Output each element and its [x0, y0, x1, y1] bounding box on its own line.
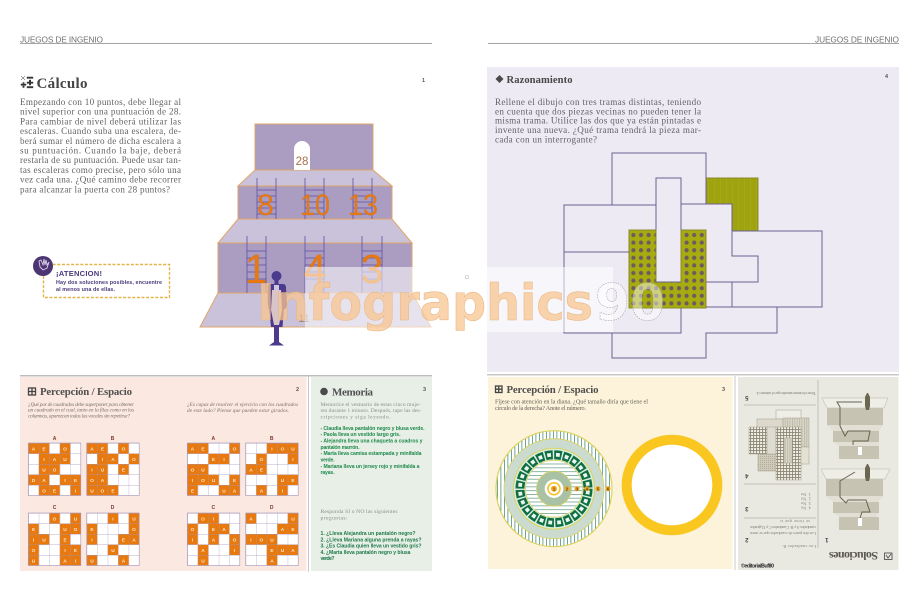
ladder numbers: 10	[300, 189, 330, 222]
list: outfit descriptions: - Claudia lleva pantalón negro y blusa verde.	[320, 426, 425, 432]
grid: right A: EI	[212, 457, 225, 463]
grid labels: C	[53, 505, 57, 511]
text block: Razonamiento instructions: cada con un interrogante?	[495, 134, 597, 144]
solution text: cuadrados A y B. Cuadrados C y D girados	[750, 525, 816, 530]
solution numbers: 4	[744, 472, 748, 478]
solution text: 1. No	[800, 492, 811, 497]
ladder numbers: 3	[361, 246, 383, 292]
piece: olive stripes	[706, 178, 758, 231]
list: outfit descriptions: rayas.	[320, 470, 335, 476]
text block: answer prompt	[320, 509, 398, 522]
grid: left A	[28, 443, 81, 496]
callout: atención: Hay dos soluciones posibles, encuentre	[56, 280, 162, 286]
solution numbers: 2	[744, 536, 748, 542]
chart: target circle	[496, 431, 612, 547]
solution text: 3. No	[800, 501, 811, 506]
text block: Cálculo instructions: escaleras. Cuando suba una escalera, de-	[20, 126, 181, 136]
panel: Cálculo text	[20, 76, 181, 194]
page number 3: 3	[722, 387, 725, 393]
list: outfit descriptions	[320, 426, 425, 476]
heading: Razonamiento: Razonamiento	[506, 75, 572, 86]
grid: right A: OU	[191, 467, 205, 473]
grid: right B: AI	[260, 488, 284, 494]
ladders upper level	[257, 178, 372, 219]
text block: Cálculo instructions: tas escaleras como precise, pero sólo una	[20, 165, 181, 175]
text block: right question: de este lado? Piense que pueden estar girados.	[187, 408, 289, 414]
list: questions: 2. ¿Lleva Mariana alguna prenda a rayas?	[320, 538, 422, 544]
grid: right C: U	[201, 558, 205, 564]
grid: right B	[246, 443, 298, 496]
heading: Cálculo: Cálculo	[36, 76, 88, 92]
grid: right A	[187, 443, 240, 496]
grid: right D: AE	[281, 527, 295, 533]
grid: left A: UO	[42, 467, 57, 473]
text block: answer prompt: Responda SI o NO las siguientes	[320, 509, 398, 515]
grid labels: B	[270, 436, 274, 442]
page number 2: 2	[296, 387, 299, 393]
solution numbers	[744, 394, 828, 542]
grid: left D: IU	[112, 516, 136, 522]
grid: left A: AEO	[32, 446, 67, 452]
piece: dotted U	[629, 230, 706, 308]
page header: left: JUEGOS DE INGENIO	[20, 34, 104, 44]
grid: right D: IOU	[250, 537, 274, 543]
grid: right C: AI	[201, 548, 236, 554]
grid: left A: OEI	[42, 488, 77, 494]
grid: left C: EUO	[32, 527, 78, 533]
solution text: Los dos pares de cuadrados que se unen	[749, 531, 816, 536]
list: outfit descriptions: pantalón marrón.	[320, 445, 360, 451]
grid labels: B	[111, 436, 115, 442]
grid: left A: IAU	[43, 457, 67, 463]
solution text: Tiene el mismo tamaño que el número 4.	[756, 391, 816, 396]
grid: right D: A	[270, 558, 274, 564]
callout: atención: ¡ATENCION!	[56, 269, 102, 278]
icon: check box	[884, 553, 892, 560]
grid: right B: AE	[249, 467, 264, 473]
text block: right question	[187, 402, 298, 414]
text block: answer prompt: preguntas:	[320, 516, 348, 522]
diagram: puzzle pieces	[564, 153, 822, 358]
ladder numbers: 13	[348, 189, 378, 222]
list: questions: 3. ¿Es Claudia quien lleva un vestido gris?	[320, 544, 422, 550]
grid: right A: AEO	[191, 446, 237, 452]
icon: diamond	[496, 75, 504, 83]
list: questions	[320, 531, 422, 562]
text block: Cálculo instructions: nivel superior con una puntuación de 28.	[20, 107, 181, 117]
grid labels	[53, 436, 274, 511]
text block: right question: ¿Es capaz de resolver el ejercicio con los cuadrados	[187, 402, 298, 408]
solution maze	[749, 410, 809, 480]
grid labels: D	[111, 505, 115, 511]
grid: left D: U	[111, 548, 115, 554]
icon: door with 28: 28	[296, 156, 308, 168]
grid: left C: OU	[53, 516, 78, 522]
heading: Memoria: Memoria	[332, 386, 374, 398]
text block: Memoria intro: Memorice el vestuario de estas cinco muje-	[320, 402, 421, 408]
page number 4: 4	[885, 74, 889, 80]
grid: right D	[246, 513, 298, 566]
grid: left D	[87, 513, 139, 566]
text block: left question: columnas, aparezcan todas las vocales sin repetirse?	[28, 414, 130, 420]
grid: left B: OA	[90, 478, 105, 484]
panel: Soluciones (upside down)	[738, 377, 898, 570]
list: outfit descriptions: - Paola lleva un vestido largo gris.	[320, 432, 401, 438]
grid: left D: UA	[90, 558, 126, 564]
text block: Cálculo instructions: Empezando con 10 puntos, debe llegar al	[20, 97, 181, 107]
text block: Cálculo instructions	[20, 97, 181, 194]
heading: Soluciones: Soluciones	[829, 549, 878, 563]
scale numbers: 123456	[553, 486, 610, 492]
grid: right B: UE	[281, 478, 295, 484]
grid labels: C	[211, 505, 215, 511]
text block: question: círculo de la derecha? Anote el número.	[495, 405, 586, 412]
grid: right C: IAO	[192, 537, 237, 543]
grid labels: D	[270, 505, 274, 511]
icon: grid squares	[28, 388, 36, 395]
page number 3: 3	[423, 387, 426, 393]
watermark: Infographics	[257, 274, 593, 332]
text block: Cálculo instructions: berá sumar el número de dicha escalera a	[20, 136, 181, 146]
publisher credit: ©editorialBuf80	[741, 562, 774, 570]
grid: left B	[87, 443, 139, 496]
solution numbers: 5	[744, 394, 748, 400]
grid: left C: OIE	[32, 548, 78, 554]
grid: left C: IUE	[33, 537, 67, 543]
list: questions: verde?	[320, 556, 334, 562]
text block: Razonamiento instructions: invente una nueva. ¿Qué trama tendrá la pieza mar-	[495, 125, 701, 135]
text block: Memoria intro	[320, 402, 422, 420]
rule above lower panels	[20, 374, 899, 572]
piece outlines	[564, 153, 822, 358]
solution numbers: 3	[744, 505, 748, 511]
solution text	[749, 391, 816, 549]
solution pyramid 2	[821, 464, 890, 530]
text block: Cálculo instructions: su puntuación. Cuando la baje, deberá	[20, 146, 181, 156]
icon: person figure	[268, 271, 287, 346]
grid: left B: AEO	[90, 446, 126, 452]
grid: right C: OI	[201, 516, 215, 522]
list: outfit descriptions: - Marta lleva camisa estampada y minifalda	[320, 451, 422, 457]
ladder numbers: 11	[298, 313, 310, 325]
list: questions: 4. ¿Marta lleva pantalón negro y blusa	[320, 550, 411, 556]
ladder numbers: 8	[257, 189, 274, 222]
text block: Memoria intro: cripciones y siga leyendo.	[320, 414, 391, 420]
grid labels: A	[53, 436, 57, 442]
solution text: 4. No	[800, 506, 811, 510]
solution numbers: 1	[824, 536, 828, 542]
grid: left A: DAIE	[32, 478, 78, 484]
icon: hand badge	[33, 256, 53, 276]
heading: Percepción / Espacio: Percepción / Espacio	[40, 386, 132, 398]
text block: Razonamiento instructions	[495, 97, 701, 144]
ladder numbers: 1	[245, 246, 267, 292]
panel: Percepción / Espacio right	[488, 377, 732, 569]
grid: left D: IEA	[91, 537, 136, 543]
solution pyramid 1	[822, 393, 888, 459]
text block: Memoria intro: res durante 1 minuto. Después, tape las des-	[320, 408, 422, 414]
text block: Cálculo instructions: Para cambiar de nivel deberá utilizar las	[20, 116, 181, 126]
text block: Cálculo instructions: para alcanzar la puerta con 28 puntos?	[20, 184, 170, 194]
chart: stepped pyramid with ladders	[200, 124, 431, 346]
page header: right: JUEGOS DE INGENIO	[815, 34, 900, 44]
grid: left B: IAO	[102, 457, 136, 463]
grid: left B: IUE	[91, 467, 126, 473]
dividers	[744, 380, 818, 548]
text block: left question: un cuadrado en el cual, tanto en la filas como en las	[28, 406, 134, 414]
icon: circle bullet	[320, 388, 328, 395]
icon: door with 28	[294, 141, 310, 170]
panel: Percepción / Espacio left	[20, 377, 306, 571]
list: questions: 1. ¿Lleva Alejandra un pantalón negro?	[320, 531, 416, 537]
page number 1: 1	[422, 78, 425, 84]
grid: right A: IOUE	[192, 478, 237, 484]
list: outfit descriptions: - Alejandra lleva una chaqueta a cuadros y	[320, 438, 423, 444]
list: outfit descriptions: - Mariana lleva un jersey rojo y minifalda a	[320, 464, 420, 470]
list: outfit descriptions: verde.	[320, 458, 335, 464]
ladder numbers	[245, 189, 383, 325]
grid: right C	[187, 513, 240, 566]
icon: grid squares	[496, 386, 502, 392]
solution text: se tiene que ir	[780, 519, 810, 524]
text block: Cálculo instructions: vez cada una. ¿Qué camino debe recorrer	[20, 175, 181, 185]
heading: Percepción / Espacio: Percepción / Espacio	[506, 384, 598, 396]
panel: Memoria	[311, 377, 432, 571]
grid: right A: EUA	[191, 488, 237, 494]
text block: left question: ¿Qué par de cuadrados debe superponer para obtener	[28, 402, 135, 408]
chart: yellow ring	[627, 440, 717, 530]
ladder numbers: 4	[304, 246, 326, 292]
text block: question	[495, 398, 648, 412]
solution text: Los cuadrados B.	[782, 544, 816, 549]
grid: left C	[28, 513, 81, 566]
callout: atención: al menos una de ellas.	[56, 287, 116, 293]
solution text: 2. No	[800, 496, 811, 502]
text block: Razonamiento instructions: misma trama. Utilice las dos que ya están pintadas e	[495, 116, 701, 126]
panel: Razonamiento	[487, 67, 899, 372]
icon: math symbols	[21, 76, 33, 88]
grid: right B: OI	[260, 457, 294, 463]
grid labels: A	[211, 436, 215, 442]
grid: left B: UOE	[90, 488, 115, 494]
grid: right D: EUA	[270, 548, 295, 554]
text block: left question	[28, 402, 135, 420]
ladders lower level	[247, 236, 382, 293]
grid: right B: IOU	[271, 446, 295, 452]
grid: left C: UAI	[32, 558, 77, 564]
grid: right C: OEA	[191, 527, 226, 533]
grid: right D: AU	[249, 516, 295, 522]
text block: question: Fíjese con atención en la diana. ¿Qué tamaño diría que tiene el	[495, 398, 648, 406]
callout: atención	[33, 256, 170, 298]
watermark: 90	[595, 274, 665, 332]
text block: Razonamiento instructions: en cuenta que dos piezas vecinas no pueden tener la	[495, 106, 701, 116]
grid: left D: EO	[90, 527, 136, 533]
text block: Razonamiento instructions: Rellene el dibujo con tres tramas distintas, teniendo	[495, 97, 701, 107]
text block: Cálculo instructions: restarla de su puntuación. Puede usar tan-	[20, 155, 181, 165]
